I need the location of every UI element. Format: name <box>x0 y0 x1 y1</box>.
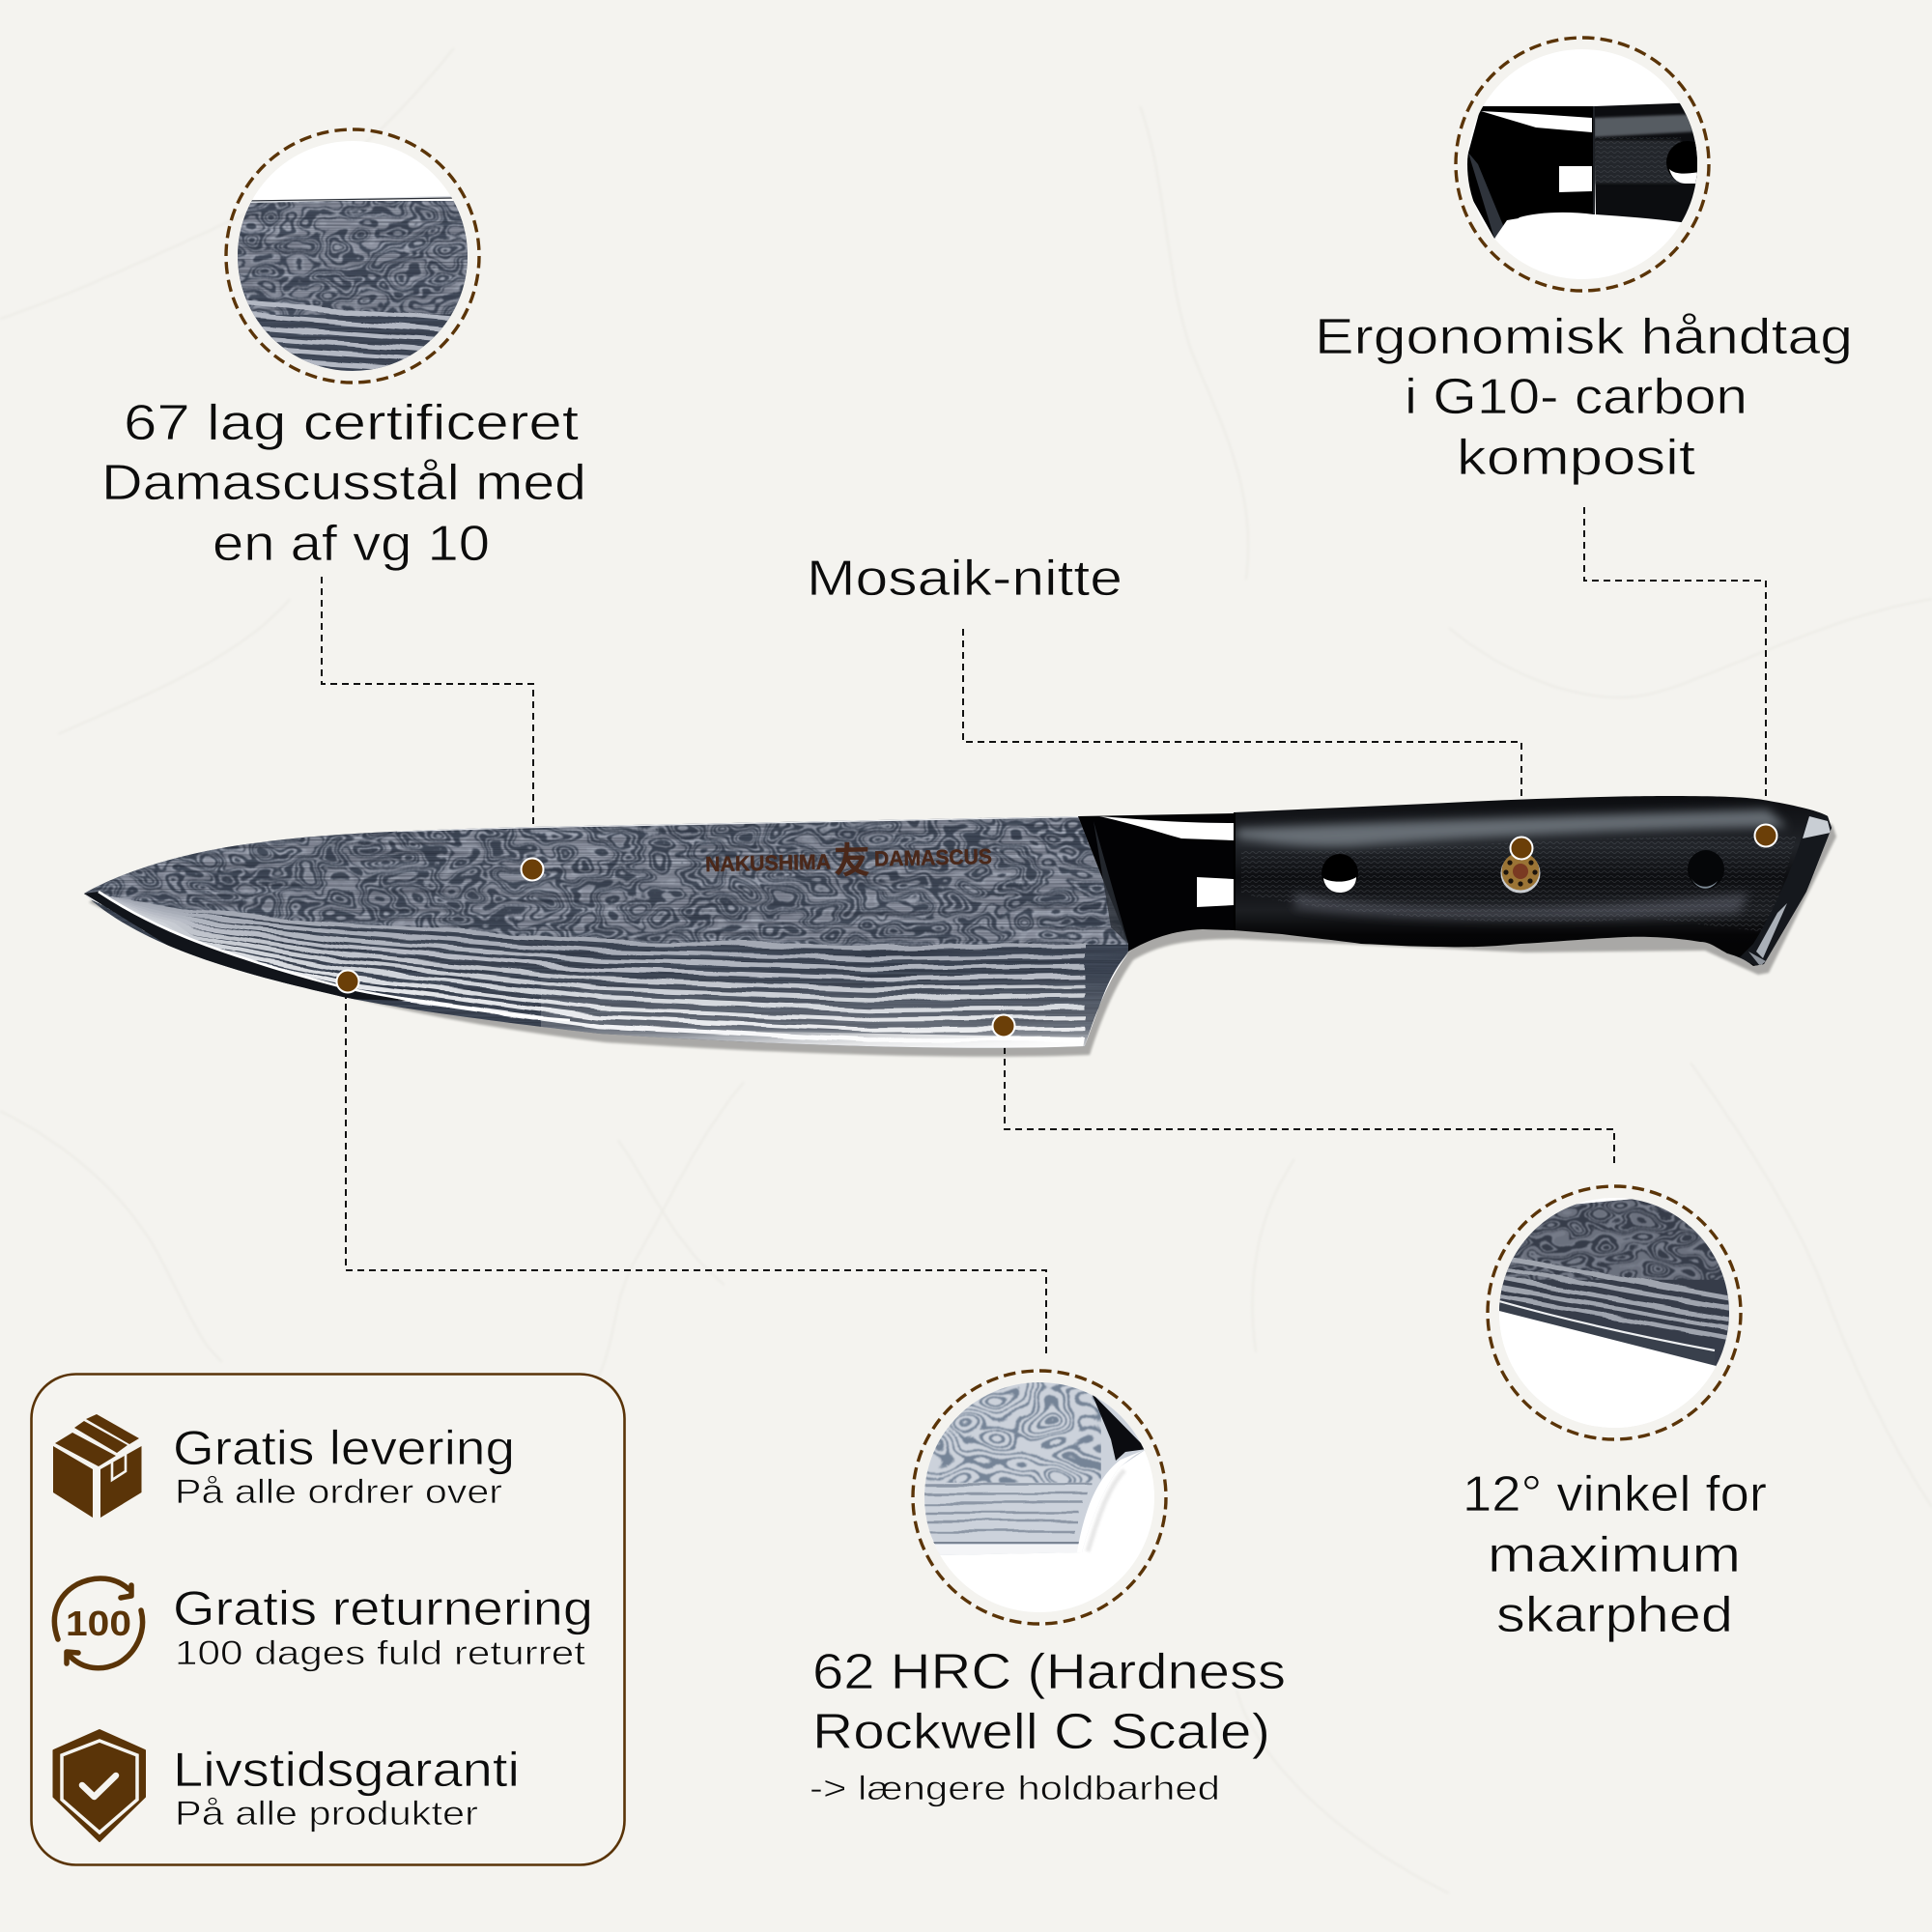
dot: edge angle hardness <box>336 970 359 993</box>
label: handle <box>1315 309 1853 486</box>
brand: NAKUSHIMA: NAKUSHIMA <box>705 849 831 876</box>
handle <box>1234 792 1837 971</box>
text: free returns: Gratis returnering <box>173 1581 593 1635</box>
label: edge angle: 12° vinkel for <box>1463 1466 1767 1522</box>
brand: DAMASCUS: DAMASCUS <box>874 844 992 870</box>
label: damascus steel: 67 lag certificeret <box>124 395 580 451</box>
icon: 100 day return <box>54 1578 143 1668</box>
dot: heel <box>993 1014 1014 1037</box>
connector: mosaic rivet <box>963 629 1521 838</box>
handle: grey highlight band <box>1236 810 1787 920</box>
label: edge angle <box>1463 1466 1767 1643</box>
connector: handle <box>1584 507 1766 826</box>
icon: package <box>53 1414 141 1518</box>
label: hardness: Rockwell C Scale) <box>812 1704 1270 1760</box>
bolster part <box>1463 106 1594 239</box>
handle: carbon weave <box>1241 836 1797 932</box>
marker dots <box>336 825 1777 1037</box>
blade: spine highlight <box>397 816 1078 831</box>
dashed connector lines <box>322 507 1766 1355</box>
label: damascus steel <box>101 395 586 572</box>
text: lifetime warranty <box>173 1743 520 1833</box>
label: handle: komposit <box>1457 430 1696 486</box>
connector: 12 degree angle <box>1005 1036 1614 1164</box>
knife shadow <box>89 805 1836 1057</box>
blade: brand mark <box>705 838 992 885</box>
handle part <box>1594 102 1700 224</box>
label: edge angle: maximum <box>1488 1527 1741 1583</box>
text: free delivery: Gratis levering <box>173 1421 515 1475</box>
connector: Damascus steel <box>322 577 533 860</box>
blade: damascus steel <box>84 816 1128 1048</box>
rivet: mosaic <box>1501 852 1540 893</box>
brand: kanji: 友 <box>834 841 870 882</box>
dot: handle <box>1754 825 1777 846</box>
label: damascus steel: Damascusstål med <box>101 455 586 511</box>
text: free delivery: På alle ordrer over <box>175 1473 502 1511</box>
icon: shield check <box>54 1730 145 1841</box>
text: free delivery <box>173 1421 515 1511</box>
panel: guarantees <box>31 1374 624 1864</box>
blade: polished edge <box>541 981 1109 1048</box>
handle: metal end cap <box>1739 814 1835 971</box>
label: hardness <box>810 1644 1286 1807</box>
text: free returns: 100 dages fuld returret <box>175 1634 585 1672</box>
sublabel: durability: -> længere holdbarhed <box>810 1770 1220 1807</box>
label: mosaic rivet: Mosaik-nitte <box>807 551 1122 607</box>
text: lifetime warranty: Livstidsgaranti <box>173 1743 520 1797</box>
blade: heel highlight <box>1085 933 1160 1046</box>
blade: lower stripes <box>84 894 1085 1040</box>
circle: handle detail <box>1456 38 1710 291</box>
label: handle: i G10- carbon <box>1405 369 1747 425</box>
bolster <box>1078 813 1234 952</box>
connector: hardness <box>346 992 1046 1355</box>
bolster: top shine <box>1099 816 1234 840</box>
circle: damascus steel detail <box>226 129 479 383</box>
text: free returns <box>173 1581 593 1672</box>
bolster: square shine <box>1197 877 1234 907</box>
rivet: left <box>1321 854 1358 893</box>
icon: 100 day return: 100 <box>66 1604 131 1643</box>
knife <box>77 792 1837 1058</box>
dot: mosaic rivet <box>1511 837 1532 860</box>
label: edge angle: skarphed <box>1496 1587 1733 1643</box>
label: hardness: 62 HRC (Hardness <box>812 1644 1286 1700</box>
label: damascus steel: en af vg 10 <box>213 516 490 572</box>
bolster corner <box>1092 1393 1147 1461</box>
rivet: right <box>1688 850 1724 889</box>
dot: damascus steel <box>522 858 543 881</box>
label: handle: Ergonomisk håndtag <box>1315 309 1853 365</box>
circle: hardness detail <box>913 1371 1166 1624</box>
text: lifetime warranty: På alle produkter <box>175 1795 478 1833</box>
circle: edge angle detail <box>1488 1186 1741 1449</box>
